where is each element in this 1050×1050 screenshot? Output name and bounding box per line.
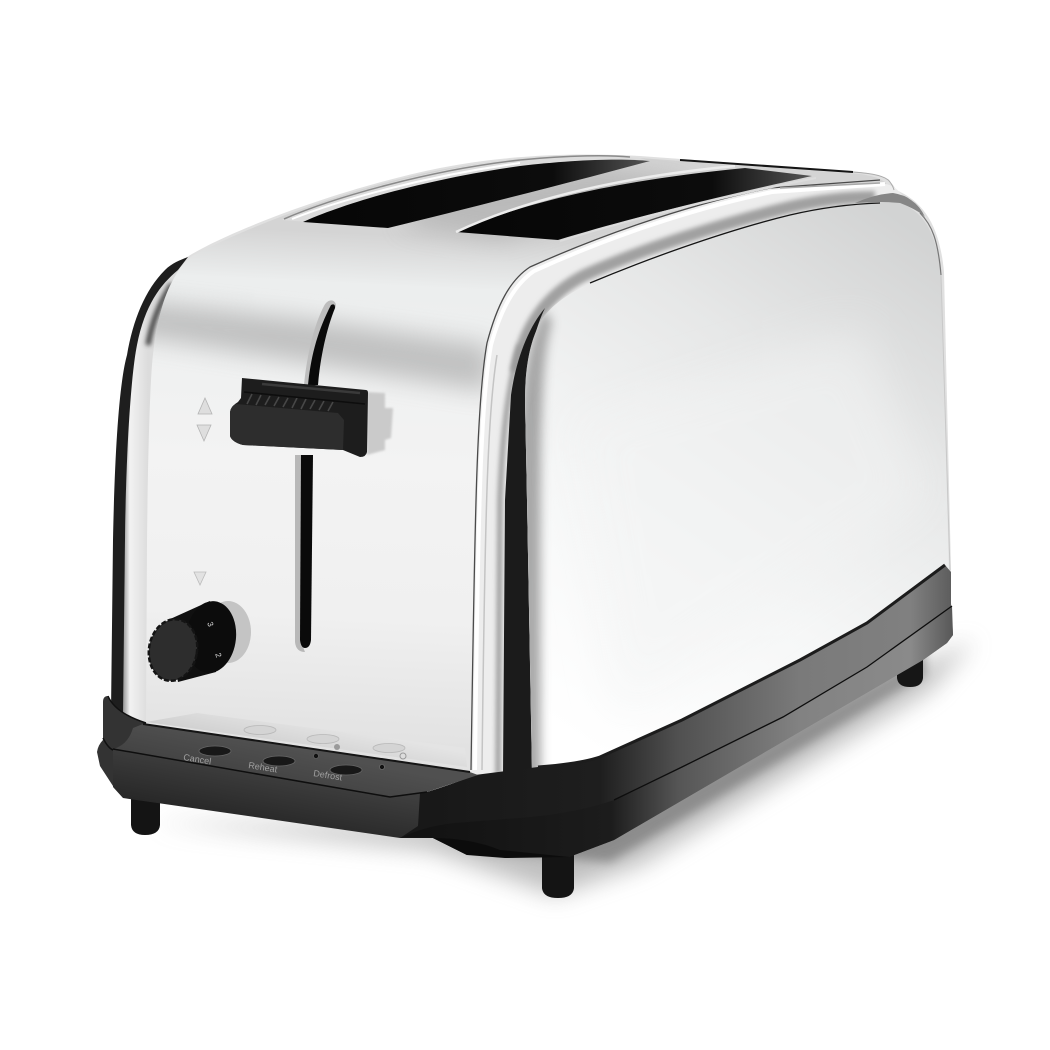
panel corner crescent bbox=[855, 193, 925, 217]
rim dark gradient beside black band bbox=[498, 345, 520, 775]
lower white glow bbox=[570, 330, 930, 710]
side panel bbox=[519, 193, 950, 800]
defrost button bbox=[330, 765, 362, 775]
panel top black seam bbox=[590, 203, 880, 283]
base underside dark bbox=[433, 838, 569, 858]
defrost label: Defrost bbox=[313, 768, 343, 783]
reheat indicator light bbox=[314, 754, 318, 758]
lever reflection bbox=[367, 392, 393, 455]
left soft edge on side panel bbox=[519, 310, 552, 800]
toaster body silhouette bbox=[122, 154, 951, 785]
rim outer thin line bbox=[471, 180, 880, 770]
rim gray shading above panel bbox=[516, 197, 875, 372]
knob number 2: 2 bbox=[213, 652, 223, 659]
front and top surface bbox=[146, 156, 888, 770]
base top seam bbox=[538, 565, 945, 767]
browning knob bbox=[144, 599, 251, 685]
rear slot bbox=[282, 155, 650, 228]
left chrome strip bbox=[122, 270, 190, 725]
dial arrow bbox=[194, 572, 206, 585]
rear right foot bbox=[897, 640, 923, 687]
base front bbox=[113, 749, 420, 838]
base groove bbox=[614, 606, 952, 800]
chrome rim between front and side bbox=[470, 180, 906, 775]
reheat button bbox=[263, 756, 295, 766]
lever slot bbox=[295, 300, 336, 652]
knob number 3: 3 bbox=[205, 621, 215, 628]
reheat label: Reheat bbox=[248, 760, 278, 775]
lever handle bbox=[230, 378, 393, 457]
rim black reflection band bbox=[503, 308, 545, 775]
front right foot bbox=[542, 845, 574, 898]
base right side upper band bbox=[400, 565, 953, 857]
product illustration: stainless steel long-slot toaster bbox=[97, 154, 971, 905]
front left foot bbox=[131, 790, 160, 835]
panel right edge bbox=[920, 213, 941, 275]
front slot bbox=[456, 160, 894, 241]
reflected buttons bbox=[244, 726, 276, 734]
gray sheen across upper front bbox=[130, 168, 700, 392]
left strip top shading bbox=[148, 284, 172, 345]
floor shadow bbox=[150, 640, 975, 895]
cancel label: Cancel bbox=[183, 752, 212, 766]
defrost indicator light bbox=[380, 764, 384, 770]
cancel button bbox=[199, 746, 231, 756]
base bbox=[97, 565, 953, 858]
knob face bbox=[144, 615, 202, 685]
knob dial ring bbox=[205, 601, 251, 663]
control panel bbox=[113, 724, 478, 797]
left black edge bbox=[111, 257, 188, 714]
base rear left corner bbox=[97, 696, 150, 786]
base right side lower band bbox=[403, 606, 953, 857]
up arrow bbox=[198, 398, 212, 414]
panel reflection on steel bbox=[146, 713, 467, 767]
down arrow bbox=[197, 425, 211, 441]
